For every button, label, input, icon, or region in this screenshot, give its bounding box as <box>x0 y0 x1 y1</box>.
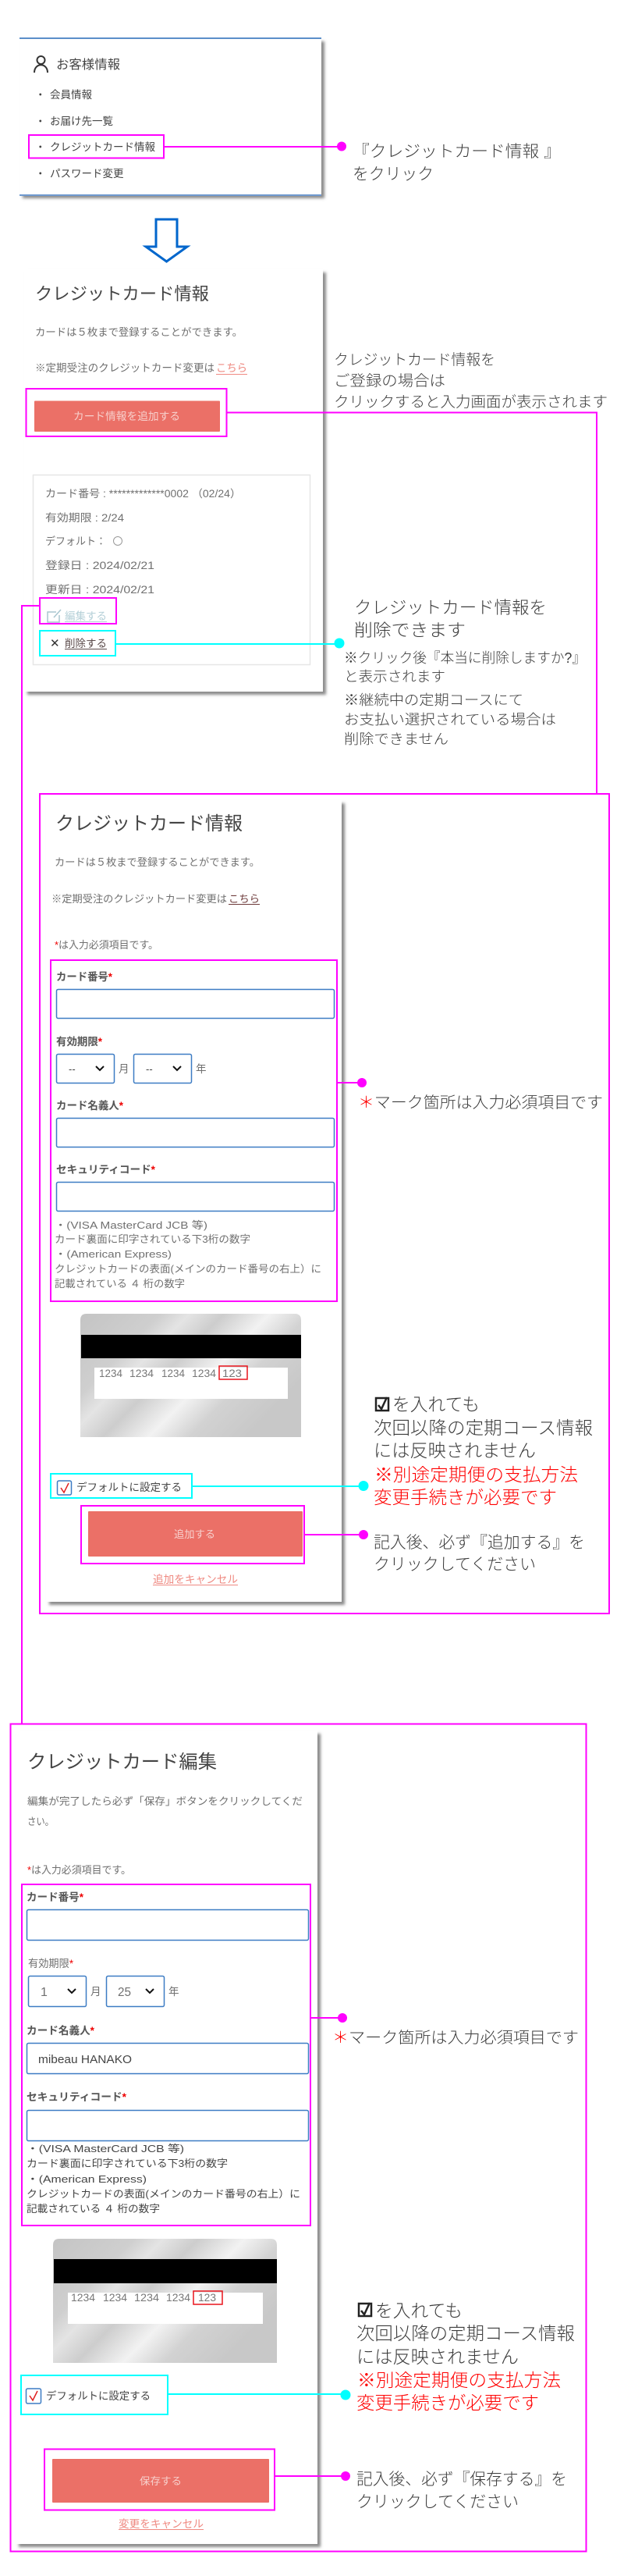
checkbox: set default <box>27 2389 151 2403</box>
highlight: add button <box>81 1506 304 1564</box>
button: save <box>52 2459 269 2503</box>
note: save reminder <box>27 1795 303 1827</box>
icon: checked box <box>359 2303 371 2316</box>
note text: には反映されません <box>374 1440 536 1461</box>
callout: click save: クリックしてください <box>356 2493 519 2511</box>
note text: 変更手続きが必要です <box>356 2393 539 2413</box>
connector: add button to add form <box>227 412 597 794</box>
note text: ※別途定期便の支払方法 <box>357 2370 561 2390</box>
select: year: -- <box>146 1063 153 1075</box>
highlight: default checkbox <box>21 2375 168 2414</box>
callout: delete card: 削除できません <box>344 731 448 747</box>
callout: registering card <box>334 351 608 411</box>
note: save reminder: さい。 <box>27 1816 54 1827</box>
button: add card: カード情報を追加する <box>73 411 180 422</box>
callout: click save <box>356 2471 567 2511</box>
input: cardholder <box>27 2044 309 2073</box>
edit link: 編集する <box>65 610 107 622</box>
note: required: *は入力必須項目です。 <box>27 1864 131 1876</box>
note text: 次回以降の定期コース情報 <box>356 2323 575 2343</box>
callout: registering card: クリックすると入力画面が表示されます <box>334 393 608 411</box>
callout: delete card: お支払い選択されている場合は <box>344 712 556 728</box>
note: subscription card change: こちら <box>229 893 260 905</box>
callout: required mark: ＊マーク箇所は入力必須項目です <box>332 2029 579 2047</box>
highlight: required fields <box>51 960 337 1301</box>
card digits: 1234 <box>71 2292 95 2304</box>
heading: クレジットカード編集 <box>27 1752 217 1773</box>
highlight: required fields <box>22 1884 310 2226</box>
updated date: 更新日 : 2024/02/21 <box>45 584 154 596</box>
card digits: 1234 <box>134 2292 160 2304</box>
checkbox: set default: デフォルトに設定する <box>76 1481 182 1493</box>
callout: registering card: クレジットカード情報を <box>334 351 495 368</box>
panel: add card form <box>46 800 342 1602</box>
callout: click credit card info <box>353 143 561 183</box>
note text <box>356 2300 575 2413</box>
security code help text <box>27 2143 300 2215</box>
security code help text: ・(American Express) <box>27 2173 147 2185</box>
connector: edit link to edit form <box>22 606 40 1724</box>
card digits: 123 <box>198 2292 216 2304</box>
icon: checked box <box>376 1397 388 1411</box>
security code help text: クレジットカードの表面(メインのカード番号の右上）に <box>27 2188 300 2200</box>
delete link: 削除する <box>65 638 107 649</box>
note: five cards: カードは５枚まで登録することができます。 <box>35 326 243 338</box>
panel: edit card form <box>16 1731 317 2544</box>
input: cardholder <box>56 1118 334 1147</box>
note: subscription card change: ※定期受注のクレジットカード変更は <box>35 362 214 374</box>
security code help text: ・(VISA MasterCard JCB 等) <box>55 1219 207 1231</box>
callout: required mark: ＊マーク箇所は入力必須項目です <box>358 1094 603 1112</box>
menu item: member info: 会員情報 <box>50 89 92 101</box>
note text: を入れても <box>375 2300 463 2321</box>
security code help text: カード裏面に印字されている下3桁の数字 <box>27 2158 228 2169</box>
card digits: 1234 <box>103 2292 127 2304</box>
note: five cards: カードは５枚まで登録することができます。 <box>55 856 260 868</box>
card digits <box>71 2292 216 2304</box>
note: required: *は入力必須項目です。 <box>55 939 158 951</box>
connector: delete to callout <box>115 639 345 648</box>
highlight: credit card menu item <box>29 135 164 158</box>
callout: click add <box>374 1534 585 1574</box>
card number: カード番号 : *************0002 （02/24） <box>45 488 241 500</box>
callout: default checkbox note <box>374 1394 593 1507</box>
callout: delete card <box>344 598 586 747</box>
connector: add button <box>304 1530 368 1539</box>
security code help text: カード裏面に印字されている下3桁の数字 <box>55 1233 250 1245</box>
card back illustration <box>53 2239 277 2363</box>
icon: person <box>34 56 48 73</box>
heading: クレジットカード情報 <box>55 813 243 834</box>
label: cardholder: カード名義人* <box>27 2024 95 2037</box>
menu item: addresses: ・ <box>35 116 45 127</box>
label: card number: カード番号* <box>27 1891 84 1903</box>
checkbox: set default: デフォルトに設定する <box>46 2389 151 2402</box>
connector: save button <box>275 2471 350 2481</box>
callout: delete card: ※継続中の定期コースにて <box>344 692 523 708</box>
note text: には反映されません <box>356 2347 519 2367</box>
connector: default checkbox <box>192 1481 368 1491</box>
select: year: 25 <box>118 1986 131 1999</box>
panel: credit card list <box>24 269 323 692</box>
callout: default checkbox note <box>356 2300 575 2413</box>
input: card number <box>56 990 334 1018</box>
callout: click credit card info: をクリック <box>353 165 434 183</box>
heading: クレジットカード情報 <box>35 284 209 304</box>
link: cancel change: 変更をキャンセル <box>119 2518 204 2530</box>
select: year <box>106 1976 179 2006</box>
label: security code: セキュリティコード* <box>56 1164 156 1176</box>
note text: を入れても <box>392 1394 480 1414</box>
note text: 次回以降の定期コース情報 <box>374 1418 593 1438</box>
input: security code <box>27 2111 309 2140</box>
highlight: delete link <box>40 631 115 656</box>
security code help text: ・(VISA MasterCard JCB 等) <box>27 2143 184 2154</box>
saved card box <box>33 475 310 665</box>
label: expiry: 有効期限* <box>28 1958 74 1969</box>
select: month: 月 <box>90 1986 101 1998</box>
frame: add form <box>40 794 609 1614</box>
callout: registering card: ご登録の場合は <box>334 372 445 390</box>
card digits: 1234 <box>166 2292 190 2304</box>
delete link: ✕ <box>50 637 60 650</box>
select: year <box>134 1054 206 1083</box>
security code help text: 記載されている ４ 桁の数字 <box>27 2203 160 2215</box>
callout: delete card: 削除できます <box>354 621 466 640</box>
card digits: 123 <box>222 1368 242 1379</box>
card back illustration <box>80 1314 301 1437</box>
input: cardholder: mibeau HANAKO <box>38 2053 132 2066</box>
menu item: credit card: ・ <box>35 141 45 153</box>
default: デフォルト： <box>45 535 106 547</box>
security code help text: 記載されている ４ 桁の数字 <box>55 1278 185 1290</box>
link: cancel add: 追加をキャンセル <box>153 1574 238 1585</box>
callout: click add: クリックしてください <box>374 1556 536 1574</box>
security code help text: ・(American Express) <box>55 1248 172 1260</box>
highlight: security digits <box>219 1366 247 1379</box>
note text: 変更手続きが必要です <box>374 1487 557 1507</box>
arrow: down <box>146 219 187 262</box>
card digits: 1234 <box>192 1368 216 1379</box>
connector: menu to callout <box>164 142 346 151</box>
registered date: 登録日 : 2024/02/21 <box>45 560 154 571</box>
expiry: 有効期限 : 2/24 <box>45 512 125 524</box>
note: subscription card change: ※定期受注のクレジットカード変更は <box>51 893 227 905</box>
connector: required fields <box>337 1078 367 1087</box>
select: year: 年 <box>168 1986 179 1998</box>
connector: required fields <box>310 2013 347 2023</box>
highlight: security digits <box>193 2291 222 2304</box>
select: year: 年 <box>196 1063 206 1075</box>
input: card number <box>27 1909 309 1941</box>
menu item: password: ・ <box>35 168 45 180</box>
note: subscription card change: こちら <box>216 362 247 374</box>
label: cardholder: カード名義人* <box>56 1099 124 1112</box>
button: add card <box>34 401 220 432</box>
card digits: 1234 <box>99 1368 122 1379</box>
panel: customer menu <box>20 37 321 196</box>
menu item: credit card: クレジットカード情報 <box>50 141 155 153</box>
button: add: 追加する <box>174 1528 215 1540</box>
label: card number: カード番号* <box>56 971 113 983</box>
delete link <box>50 637 107 650</box>
label: expiry: 有効期限* <box>56 1036 103 1048</box>
highlight: save button <box>44 2450 275 2510</box>
select: month <box>56 1054 129 1083</box>
card digits <box>99 1368 242 1379</box>
note: save reminder: 編集が完了したら必ず「保存」ボタンをクリックしてくだ <box>27 1795 303 1807</box>
card digits: 1234 <box>129 1368 154 1379</box>
note text <box>374 1394 593 1507</box>
callout: delete card: ※クリック後『本当に削除しますか?』 <box>344 650 586 666</box>
select: month: 1 <box>41 1986 48 1999</box>
menu item: password: パスワード変更 <box>50 168 124 180</box>
menu item: addresses: お届け先一覧 <box>50 116 113 127</box>
callout: click save: 記入後、必ず『保存する』を <box>356 2471 567 2489</box>
input: security code <box>56 1182 334 1212</box>
select: month <box>28 1976 101 2006</box>
menu item: member info: ・ <box>35 89 45 101</box>
security code help text: クレジットカードの表面(メインのカード番号の右上）に <box>55 1263 321 1275</box>
menu heading: お客様情報 <box>56 58 120 72</box>
callout: delete card: クレジットカード情報を <box>354 598 547 617</box>
connector: default checkbox <box>168 2390 351 2400</box>
card digits: 1234 <box>161 1368 185 1379</box>
highlight: edit link <box>40 598 116 624</box>
button: add <box>88 1511 303 1557</box>
security code help text <box>55 1219 321 1290</box>
highlight: add button <box>27 389 226 436</box>
edit link <box>48 610 107 622</box>
highlight: default checkbox <box>51 1474 192 1498</box>
callout: click credit card info: 『クレジットカード情報 』 <box>353 143 561 161</box>
button: save: 保存する <box>140 2475 182 2487</box>
select: month: -- <box>69 1063 76 1075</box>
select: month: 月 <box>119 1063 129 1075</box>
note text: ※別途定期便の支払方法 <box>374 1464 578 1485</box>
frame: edit form <box>11 1724 587 2551</box>
callout: click add: 記入後、必ず『追加する』を <box>374 1534 585 1552</box>
callout: delete card: と表示されます <box>344 669 445 685</box>
label: security code: セキュリティコード* <box>27 2091 127 2103</box>
